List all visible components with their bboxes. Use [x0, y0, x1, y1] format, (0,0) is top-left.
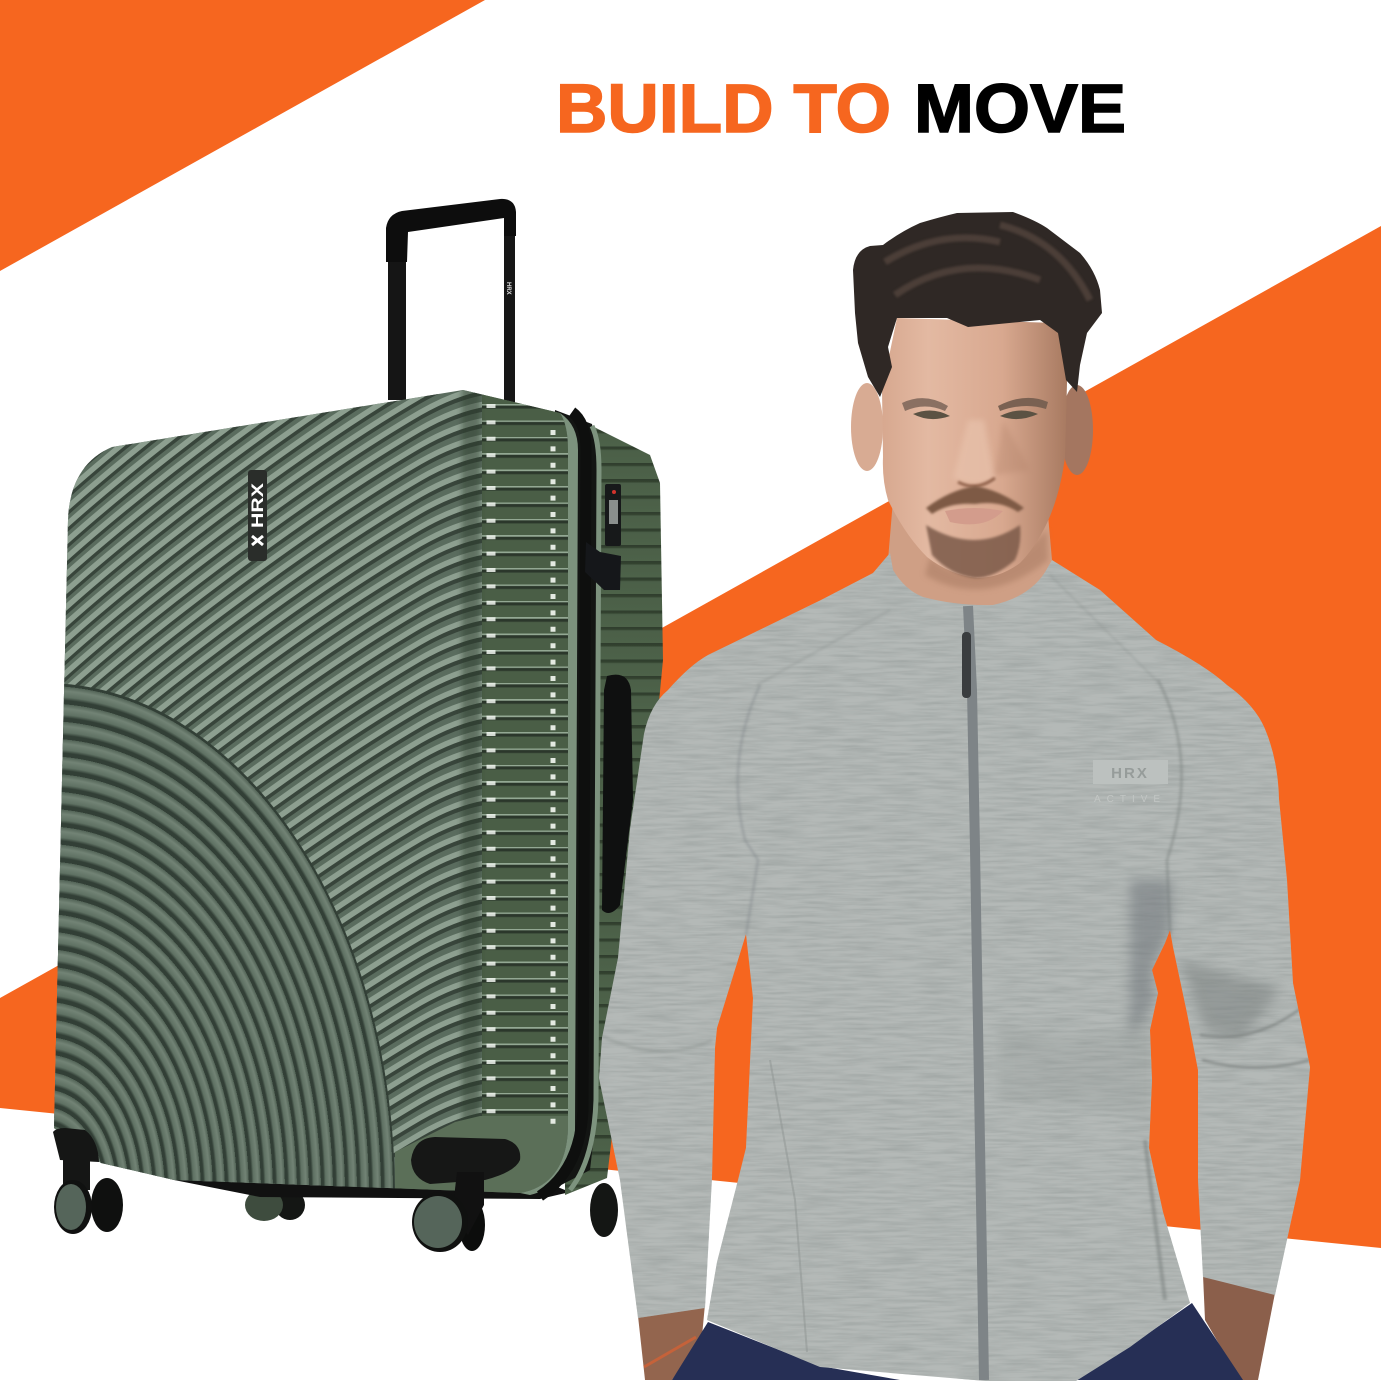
title: BUILD TO MOVE: BUILD TO	[556, 70, 891, 147]
combination lock	[585, 484, 621, 590]
HRX badge: HRX	[248, 482, 267, 528]
title: BUILD TO MOVE: MOVE	[914, 70, 1126, 147]
hands	[638, 1275, 1275, 1380]
side carry handle	[602, 675, 633, 913]
front-left wheel	[54, 1178, 123, 1234]
wheel housings	[53, 1128, 520, 1190]
plain lower corner	[395, 1116, 568, 1193]
upper curved ridges	[54, 390, 484, 1186]
model	[590, 212, 1320, 1381]
zipper	[540, 412, 586, 1196]
right panel horizontal ridges	[482, 385, 572, 1125]
hair highlights	[885, 225, 1090, 300]
gusset strip	[570, 426, 599, 1190]
facial features	[902, 398, 1048, 578]
title: BUILD TO MOVE	[556, 70, 1126, 147]
face	[882, 318, 1067, 578]
heathered texture	[590, 550, 1320, 1381]
lips	[945, 508, 1003, 524]
background: diagonal orange band	[0, 226, 1381, 1248]
background: top-left orange triangle	[0, 0, 485, 271]
hair	[853, 212, 1102, 397]
telescopic handle	[386, 199, 516, 403]
glossy highlights	[486, 404, 496, 1125]
lower-left concentric ridges	[40, 683, 395, 1215]
chin beard	[926, 525, 1020, 578]
telescopic handle: HRX	[505, 282, 511, 295]
seam strip	[520, 413, 578, 1195]
jacket	[590, 550, 1320, 1381]
moustache	[926, 486, 1024, 514]
rivets	[550, 430, 556, 1125]
neck	[888, 500, 1052, 610]
front shell	[54, 390, 568, 1193]
jacket shading	[600, 575, 1310, 1352]
zipper	[962, 606, 984, 1380]
seam backing	[540, 410, 600, 1196]
chest logo: HRX	[1111, 765, 1149, 782]
chest logo: ACTIVE	[1094, 794, 1166, 805]
ears	[851, 383, 1093, 475]
neck shadow	[925, 530, 1048, 589]
chest logo	[1093, 760, 1168, 805]
far wheels	[174, 1180, 618, 1237]
trousers	[672, 1303, 1243, 1380]
side panel	[565, 425, 663, 1195]
HRX badge	[248, 470, 267, 561]
suitcase	[40, 76, 663, 1365]
front-right wheel	[412, 1172, 485, 1252]
